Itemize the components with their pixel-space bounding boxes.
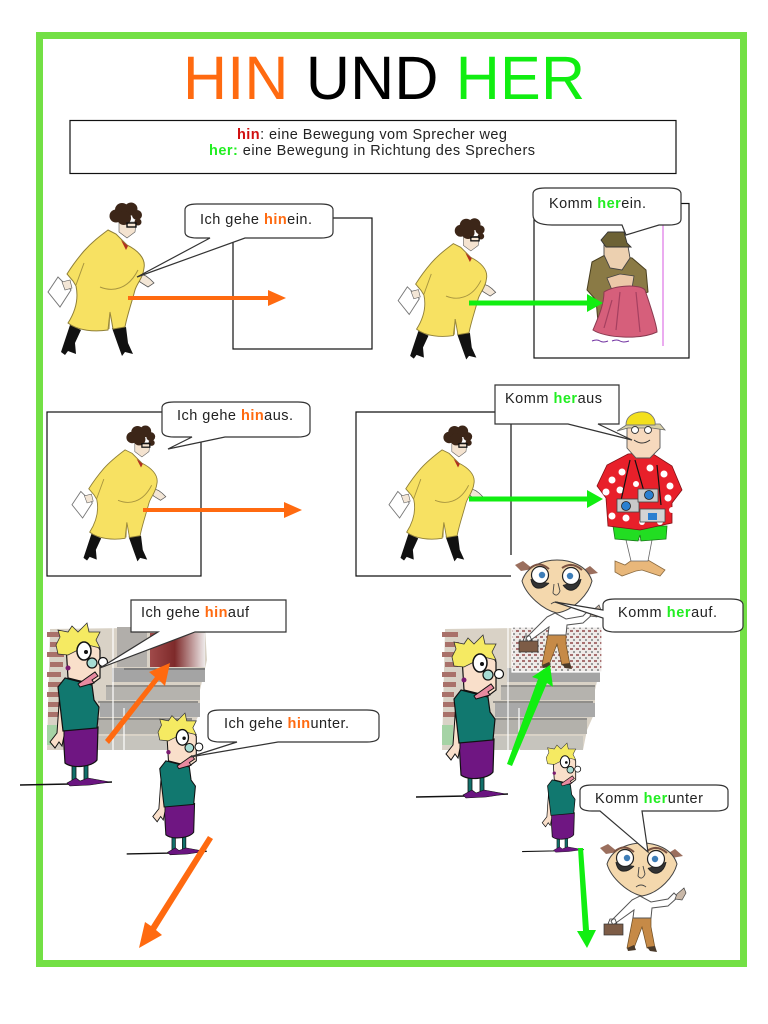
figure: woman in yellow coat (389, 426, 483, 561)
panel: hinaus (47, 402, 310, 576)
definition box (70, 120, 676, 174)
washed upper landing (512, 627, 602, 672)
title: HIN UND HER (183, 44, 585, 112)
room: hinein (233, 218, 372, 349)
arrow: green up (507, 665, 553, 766)
text: herauf: Komm herauf. (618, 605, 717, 621)
room: heraus (356, 412, 511, 576)
text: heraus: Komm heraus (505, 391, 602, 407)
speech box: hinauf (100, 600, 286, 668)
figure: woman on street (20, 623, 112, 786)
figure: small woman (522, 743, 584, 852)
speech bubble: herunter (580, 785, 728, 852)
definition: hin: hin: eine Bewegung vom Sprecher weg (237, 127, 507, 143)
text: hinunter: Ich gehe hinunter. (224, 716, 349, 732)
room: herein (534, 204, 689, 358)
speech bubble: hinunter (190, 710, 379, 757)
speech bubble: hinein (137, 204, 333, 277)
arrow: green right (469, 294, 603, 312)
definition: her: her: eine Bewegung in Richtung des Sprechers (209, 143, 535, 159)
figure: woman on street (416, 635, 508, 798)
figure: bald man upstairs (515, 560, 601, 669)
panel: herauf und herunter (416, 560, 743, 952)
dark red doorway (150, 633, 205, 667)
figure: small woman (127, 713, 207, 855)
text: hinaus: Ich gehe hinaus. (177, 408, 293, 424)
figure: bald man downstairs (600, 843, 686, 952)
panel: hinauf und hinunter (20, 600, 379, 948)
arrow: orange up (105, 663, 170, 744)
text: hinauf: Ich gehe hinauf (141, 605, 250, 621)
room: hinaus (47, 412, 201, 576)
arrow: green down (577, 848, 596, 948)
figure: old soldier in chair (587, 232, 657, 342)
arrow: orange down (139, 836, 213, 948)
panel: herein (398, 188, 689, 360)
arrow: green right (469, 490, 603, 508)
figure: tourist in red shirt (597, 412, 682, 576)
pink line (662, 225, 664, 346)
background: staircase (442, 627, 602, 750)
text: herunter: Komm herunter (595, 791, 703, 807)
arrow: orange right (143, 502, 302, 518)
background: staircase (47, 627, 207, 750)
panel: hinein (48, 202, 372, 356)
arrow: orange right (128, 290, 286, 306)
speech bubble: herein (533, 188, 681, 235)
figure: woman in yellow coat (48, 202, 154, 356)
speech bubble: herauf (555, 599, 743, 632)
figure: woman in yellow coat (398, 218, 496, 360)
panel: heraus (356, 385, 682, 576)
speech bubble: hinaus (162, 402, 310, 449)
text: hinein: Ich gehe hinein. (200, 212, 312, 228)
text: herein: Komm herein. (549, 196, 646, 212)
figure: woman in yellow coat (72, 426, 166, 561)
speech box: heraus (495, 385, 632, 440)
